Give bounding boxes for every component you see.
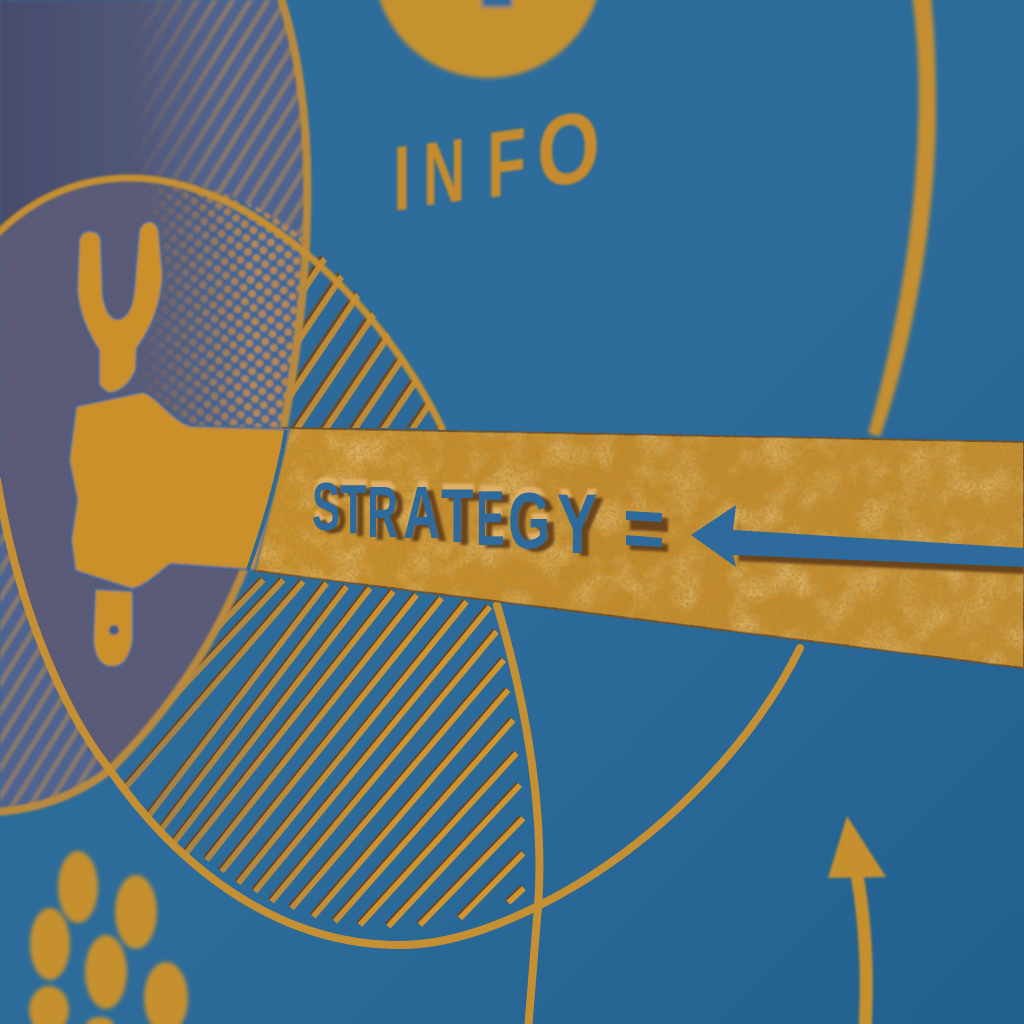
heading: INFO — [393, 89, 600, 231]
bar grain — [240, 420, 1024, 675]
outline: circle C bottom — [497, 605, 539, 1024]
bar blotches — [240, 420, 1024, 675]
dot — [85, 935, 127, 1009]
panel: overlapping circle regions — [0, 0, 311, 812]
fist — [70, 393, 288, 588]
text highlight: Y — [558, 471, 598, 565]
fork handle end — [94, 590, 132, 666]
text face: A — [403, 471, 440, 554]
letter N: N — [423, 120, 465, 226]
text shadow: T — [448, 477, 480, 561]
text highlight: A — [404, 465, 441, 548]
icon: dot cluster — [29, 851, 188, 1024]
text highlight: S — [313, 463, 341, 538]
dot — [29, 986, 69, 1024]
text highlight — [313, 463, 598, 565]
handle hole — [109, 625, 119, 635]
text shadow — [319, 472, 604, 574]
text highlight: G — [509, 471, 551, 560]
text: STRATEGY — [312, 463, 604, 574]
text shadow: S — [319, 472, 347, 547]
letter O: O — [537, 89, 600, 210]
text shadow: T — [347, 473, 374, 552]
outline: circle A — [0, 0, 307, 812]
text face: G — [508, 477, 550, 566]
region: top-left circle — [0, 0, 311, 238]
equals sign — [626, 511, 668, 552]
letter F: F — [487, 109, 526, 219]
dot — [86, 1017, 114, 1024]
region: dotted lens — [0, 178, 303, 770]
seam in bar — [248, 430, 286, 570]
panel: gold strategy bar — [240, 420, 1024, 675]
region: lower hatched lens — [102, 579, 524, 939]
equals shadow — [630, 516, 668, 552]
arrow head — [828, 816, 886, 878]
text shadow: E — [483, 479, 512, 565]
hatch shadows — [102, 579, 523, 938]
text shadow: R — [374, 475, 405, 556]
arrow face — [691, 505, 1024, 567]
text face: R — [367, 472, 398, 553]
icon: gold disc — [374, 0, 602, 78]
text face: T — [441, 474, 473, 558]
icon: notch — [482, 0, 512, 7]
arrow shadow — [738, 512, 1024, 574]
text shadow: G — [515, 480, 557, 569]
dot — [115, 875, 157, 949]
dot — [144, 962, 188, 1024]
dot — [58, 851, 98, 923]
icon: up arrow bottom right — [828, 816, 886, 1024]
fork head — [78, 222, 162, 392]
region: lower-left sliver — [0, 480, 110, 812]
text highlight: E — [477, 470, 506, 556]
arrow shaft — [857, 875, 866, 1024]
top circle icon — [374, 0, 602, 78]
text highlight: T — [442, 468, 474, 552]
equals face — [626, 511, 662, 547]
text shadow: Y — [564, 480, 604, 574]
bar body — [250, 428, 1024, 668]
text face — [312, 469, 597, 571]
text face: E — [476, 476, 505, 562]
outline: circle B lower — [0, 480, 800, 945]
outline: circle B right — [868, 0, 936, 437]
region: dotted lens large dots — [149, 184, 303, 428]
arrow pointing left — [691, 505, 1024, 574]
letter I: I — [393, 126, 411, 231]
dot — [30, 908, 70, 980]
outline: circle C top — [0, 178, 442, 428]
text shadow: A — [410, 474, 447, 557]
text face: Y — [557, 477, 597, 571]
region: upper hatched triangle — [285, 238, 442, 428]
text highlight: T — [341, 464, 368, 543]
icon: fist holding fork — [70, 222, 288, 666]
text highlight: R — [368, 466, 399, 547]
text face: T — [340, 470, 367, 549]
region: top-left hatch — [147, 0, 312, 236]
hatch lines — [103, 580, 524, 939]
text face: S — [312, 469, 340, 544]
